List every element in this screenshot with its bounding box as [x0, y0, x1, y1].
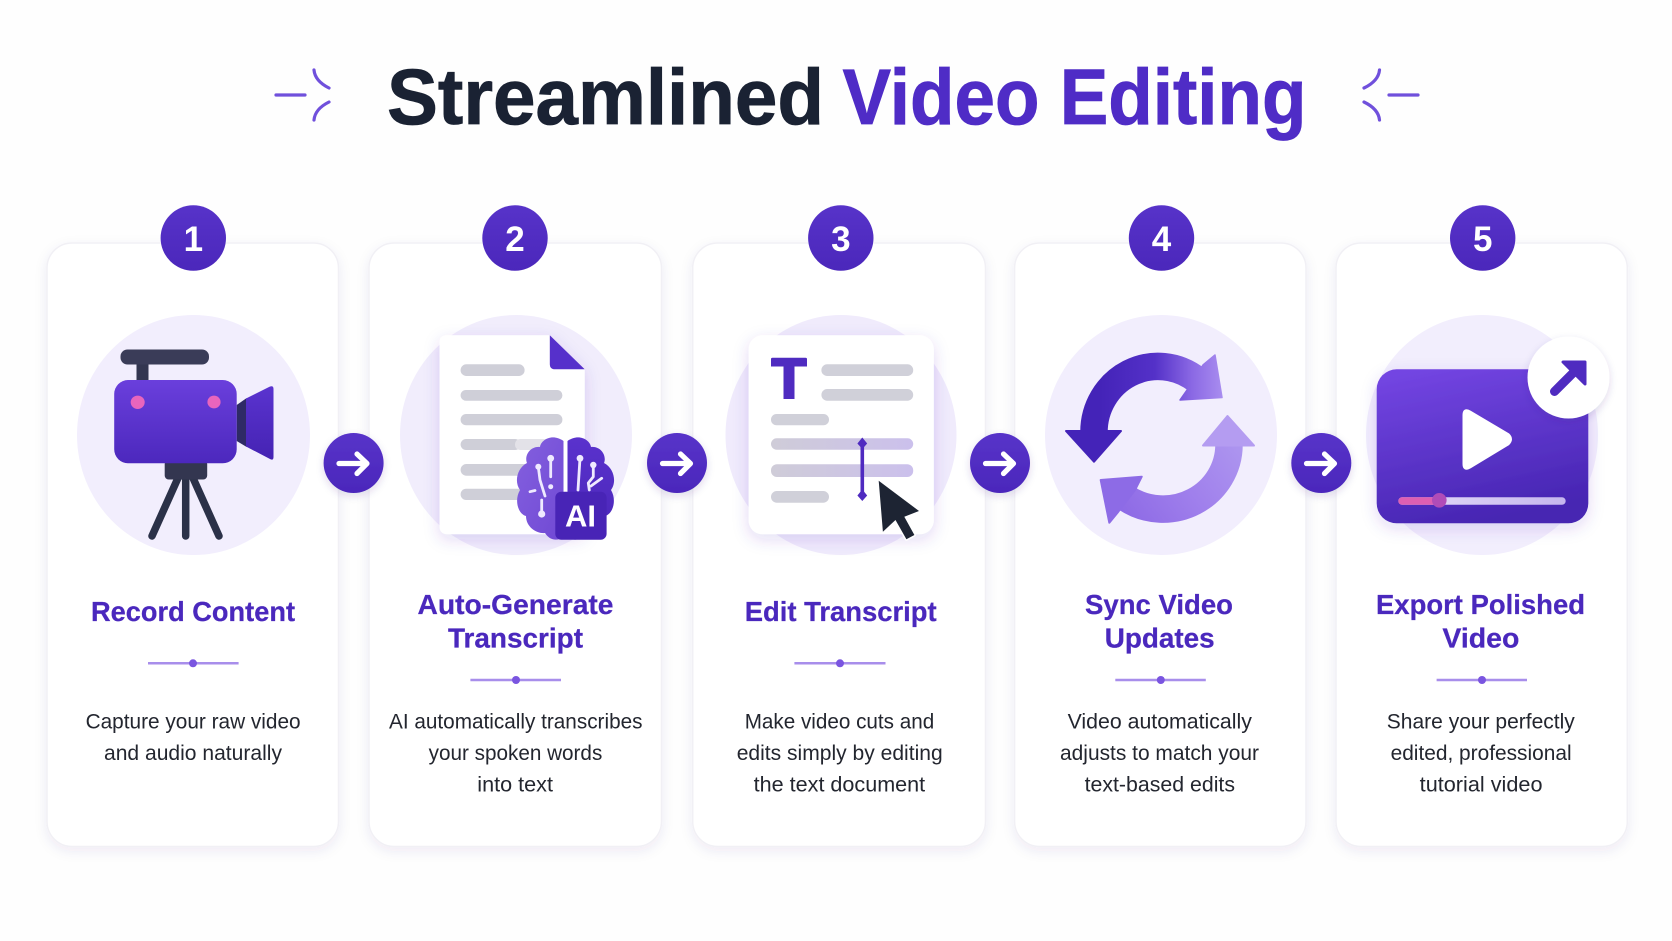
divider [1437, 676, 1527, 684]
step heading: Updates [1105, 622, 1215, 653]
step description: text-based edits [1085, 773, 1235, 797]
step heading: Record Content [91, 596, 295, 627]
icon: document with AI brain [400, 315, 632, 555]
step description [1060, 709, 1259, 797]
step description: edited, professional [1391, 741, 1572, 765]
step number 1: 1 [184, 220, 203, 259]
step number 4 [1129, 205, 1194, 271]
step heading [418, 589, 614, 653]
step number 3: 3 [831, 220, 851, 259]
step number 3 [808, 205, 874, 271]
step heading: Sync Video [1085, 589, 1233, 620]
step heading: Transcript [448, 622, 583, 653]
divider [794, 659, 886, 667]
panel: step 4 sync video updates [1015, 205, 1306, 847]
step description: your spoken words [429, 741, 602, 765]
panel: step 2 auto-generate transcript [369, 205, 662, 847]
step description: Make video cuts and [745, 709, 934, 733]
divider [148, 659, 239, 667]
icon: video player with export arrow [1366, 315, 1610, 555]
step heading [1376, 589, 1585, 653]
title [387, 52, 1306, 141]
step description: tutorial video [1420, 773, 1543, 797]
step description: the text document [754, 773, 925, 797]
step description [737, 709, 943, 797]
title: Streamlined [387, 52, 824, 141]
step number 2: 2 [505, 220, 525, 259]
icon: AI brain: AI [565, 499, 596, 534]
arrow: step 3 to 4 [970, 433, 1030, 493]
step number 2 [482, 205, 548, 271]
step heading: Auto-Generate [418, 589, 614, 620]
icon: sync arrows [1045, 315, 1277, 555]
divider [470, 676, 561, 684]
panel: step 1 record content [47, 205, 338, 847]
panel: step 5 export polished video [1336, 205, 1627, 847]
arrow: step 1 to 2 [324, 433, 384, 493]
arrow: step 4 to 5 [1291, 433, 1351, 493]
title: Video Editing [842, 52, 1306, 141]
icon: AI brain [517, 437, 614, 540]
step description: AI automatically transcribes [389, 709, 642, 733]
icon: text document with cursor [726, 315, 956, 555]
icon: left title sparkle [276, 70, 329, 120]
step description: adjusts to match your [1060, 741, 1259, 765]
arrow: step 2 to 3 [647, 433, 707, 493]
step description [86, 709, 301, 765]
step number 5: 5 [1473, 220, 1492, 259]
divider [1115, 676, 1206, 684]
step description [1387, 709, 1575, 797]
step heading: Edit Transcript [745, 596, 937, 627]
step heading: Export Polished [1376, 589, 1585, 620]
step description: Capture your raw video [86, 709, 301, 733]
step description: Share your perfectly [1387, 709, 1575, 733]
step description: edits simply by editing [737, 741, 943, 765]
step number 4: 4 [1152, 220, 1172, 259]
icon: video camera on tripod [77, 315, 310, 555]
step number 1 [161, 205, 226, 271]
panel: step 3 edit transcript [693, 205, 986, 847]
step heading [1085, 589, 1233, 653]
step description: Video automatically [1068, 709, 1252, 733]
step description: into text [477, 773, 553, 797]
icon: right title sparkle [1364, 70, 1418, 120]
step description: and audio naturally [104, 741, 282, 765]
step number 5 [1450, 205, 1515, 271]
step heading: Video [1442, 622, 1519, 653]
step description [389, 709, 642, 797]
